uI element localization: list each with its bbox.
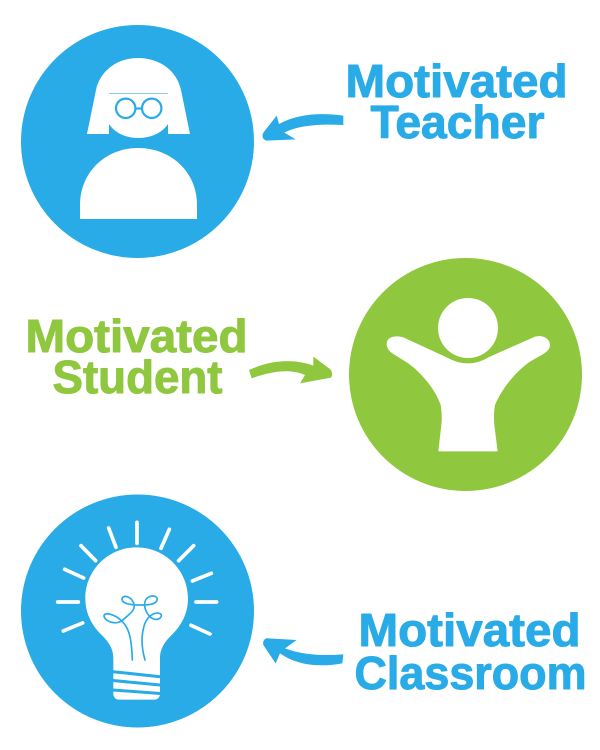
heading: motivated teacher: Motivated bbox=[346, 55, 568, 107]
heading: motivated student: Student bbox=[52, 351, 222, 403]
icon: light rays bbox=[58, 522, 217, 634]
icon: lightbulb circle bbox=[21, 494, 254, 728]
icon: student circle bbox=[349, 258, 582, 491]
heading: motivated student bbox=[26, 310, 248, 403]
heading: motivated classroom: Motivated bbox=[358, 604, 580, 656]
icon: filament bbox=[104, 596, 161, 660]
heading: motivated student: Motivated bbox=[26, 310, 248, 362]
icon: teacher circle bbox=[21, 25, 254, 258]
heading: motivated classroom bbox=[354, 604, 586, 699]
arrow: classroom arrow bbox=[263, 638, 343, 665]
heading: motivated teacher bbox=[346, 55, 568, 148]
arrow: teacher arrow bbox=[262, 114, 343, 141]
heading: motivated teacher: Teacher bbox=[370, 96, 545, 148]
arrow: student arrow bbox=[249, 357, 332, 383]
panel: motivated teacher bbox=[21, 25, 568, 258]
heading: motivated classroom: Classroom bbox=[354, 647, 586, 699]
panel: motivated student bbox=[26, 258, 582, 491]
icon: bulb glass bbox=[85, 547, 188, 700]
panel: motivated classroom bbox=[21, 494, 586, 728]
icon: bulb base stripes bbox=[113, 672, 160, 694]
